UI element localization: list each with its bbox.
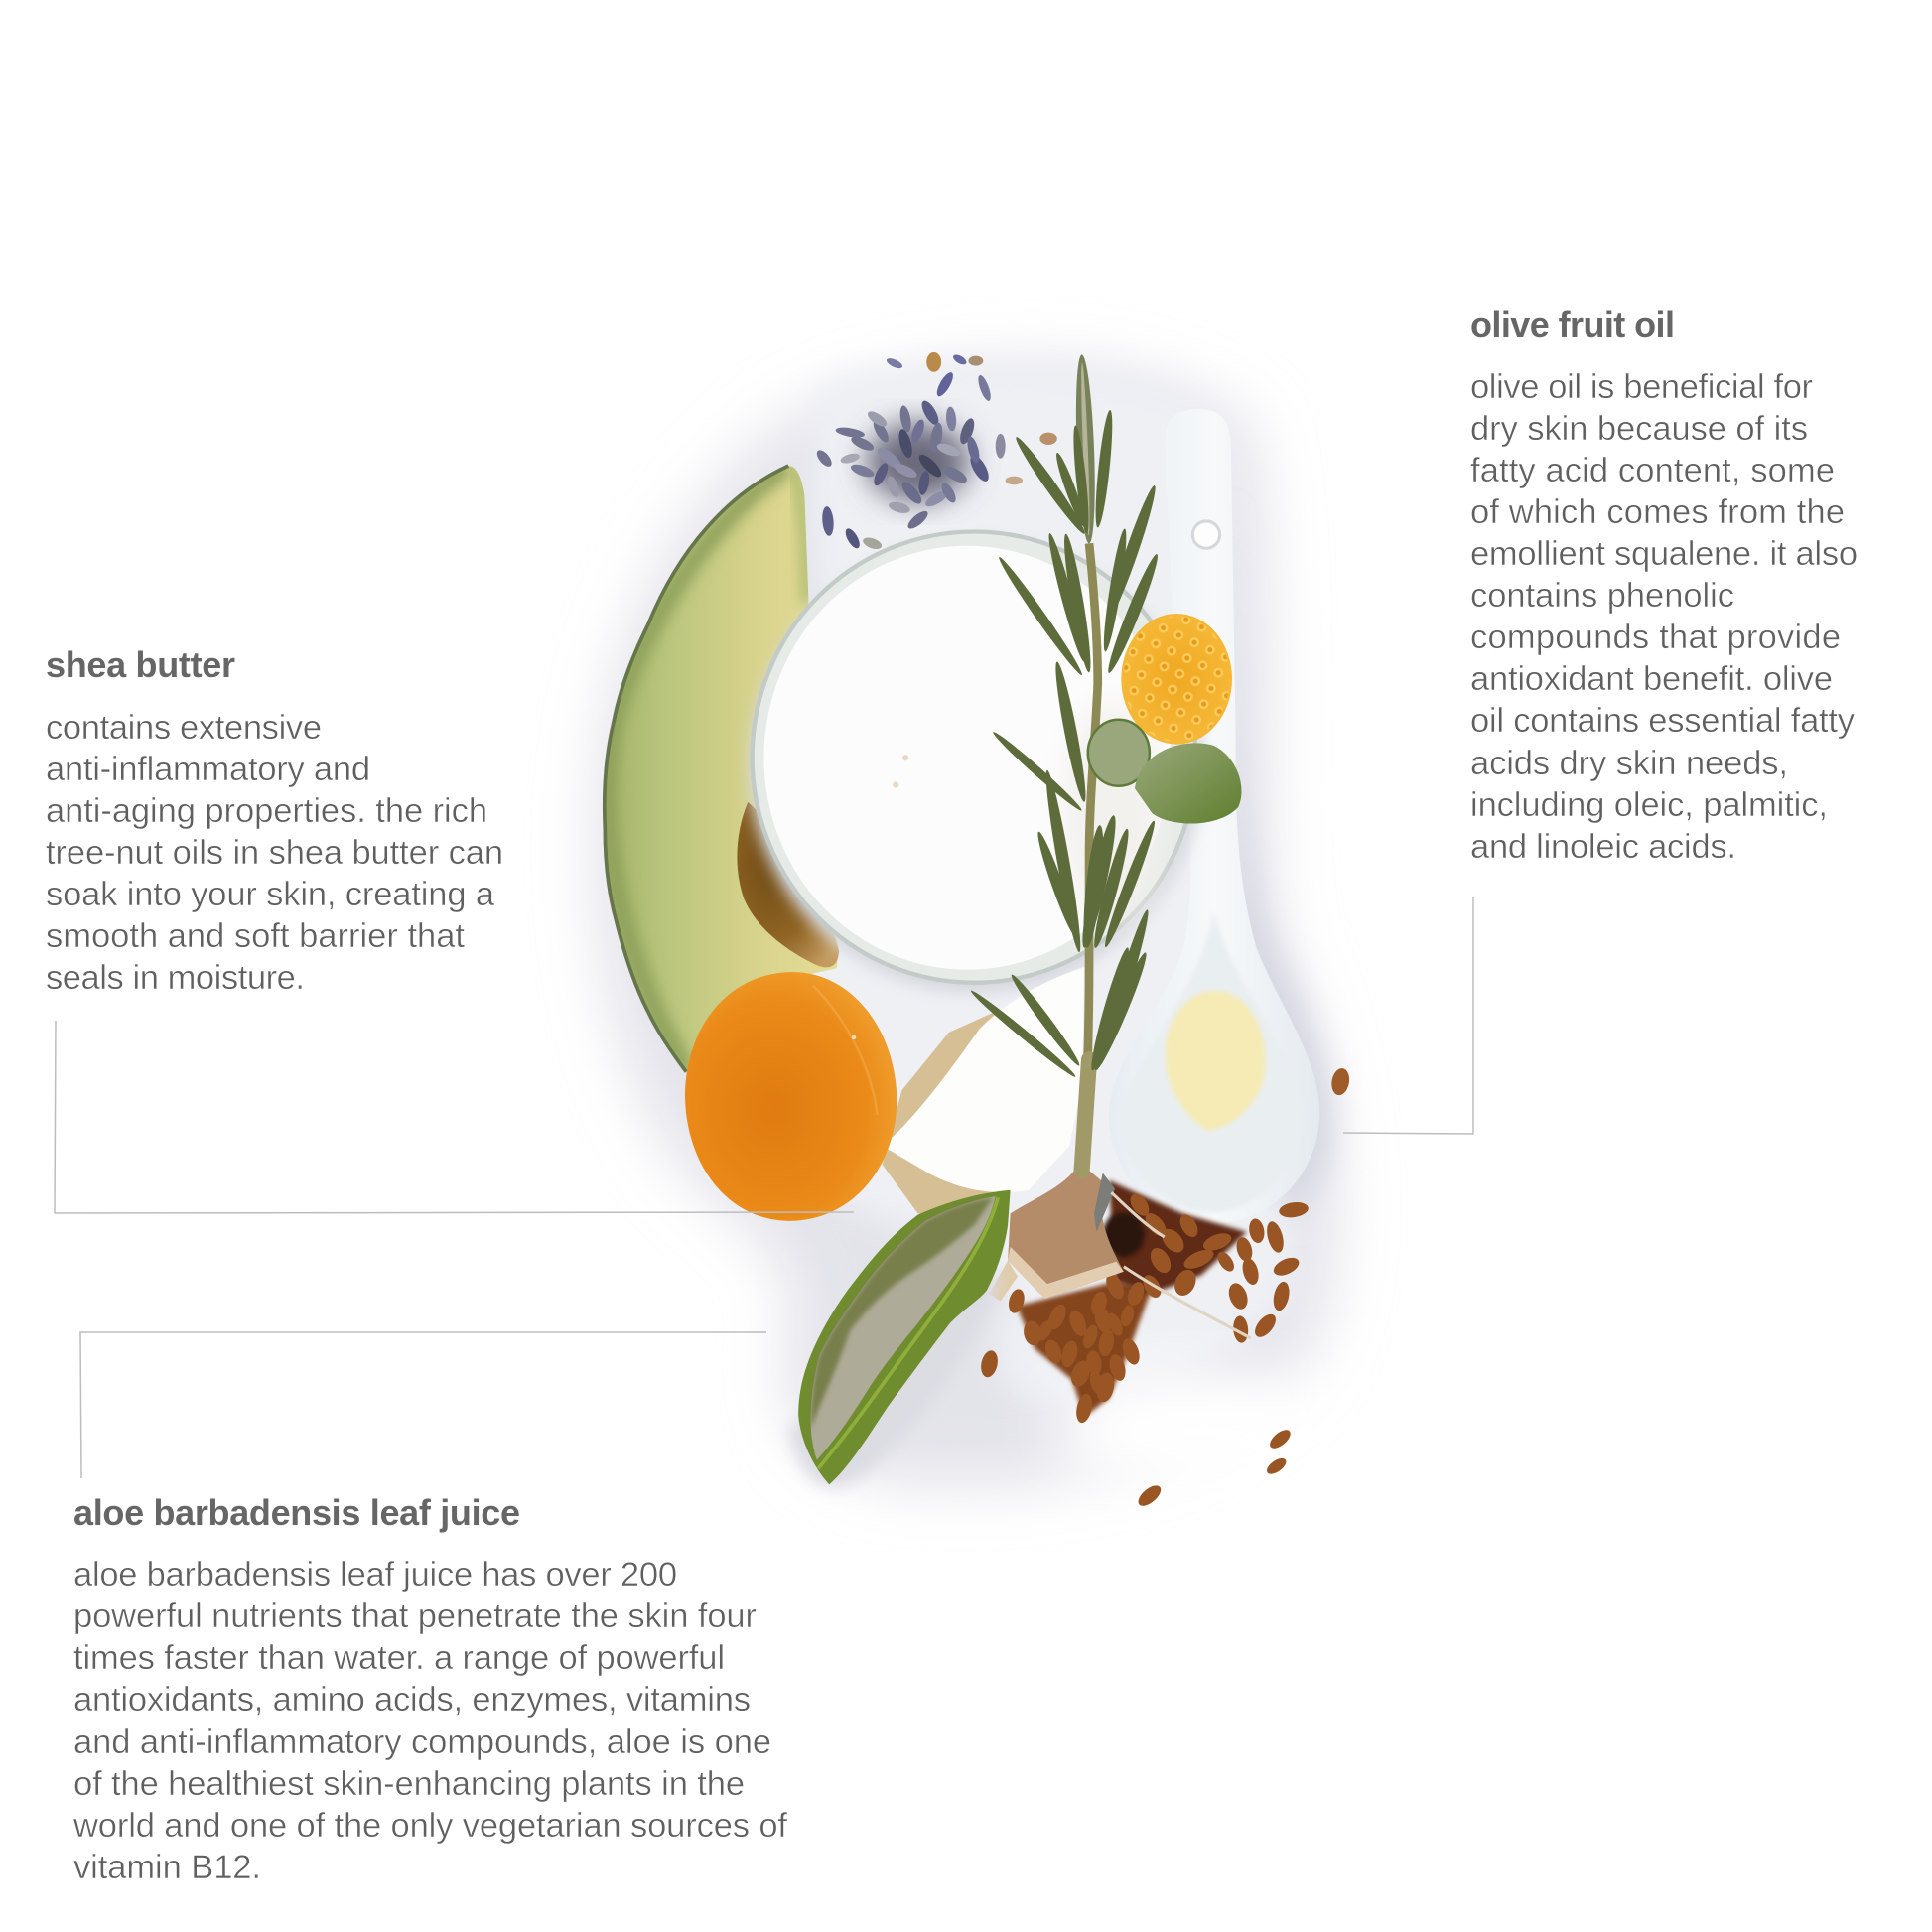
body: shea butter — [46, 709, 503, 997]
rosemary sprig — [968, 354, 1163, 1171]
body: aloe barbadensis leaf juice: of the healthiest skin-enhancing plants in the — [73, 1765, 745, 1803]
dried apricot — [685, 972, 897, 1221]
leader line: aloe barbadensis leaf juice — [80, 1332, 766, 1478]
bowl of cream — [750, 531, 1202, 993]
body: olive fruit oil: compounds that provide — [1470, 619, 1841, 656]
body: olive fruit oil: olive oil is beneficial for — [1470, 368, 1813, 406]
body: shea butter: contains extensive — [46, 709, 322, 747]
body: olive fruit oil: fatty acid content, some — [1470, 452, 1835, 489]
body: olive fruit oil: acids dry skin needs, — [1470, 745, 1788, 782]
text block: olive fruit oil — [1470, 304, 1858, 866]
body: olive fruit oil: including oleic, palmitic, — [1470, 786, 1828, 824]
heading: aloe barbadensis leaf juice: aloe barbadensis leaf juice — [73, 1492, 520, 1533]
small green leaves — [1088, 720, 1241, 824]
ingredients photo illustration — [595, 352, 1351, 1510]
body: shea butter: seals in moisture. — [46, 959, 305, 997]
body: olive fruit oil — [1470, 368, 1858, 866]
body: olive fruit oil: of which comes from the — [1470, 493, 1845, 531]
heading: shea butter: shea butter — [46, 644, 235, 685]
body: aloe barbadensis leaf juice: aloe barbadensis leaf juice has over 200 — [73, 1556, 677, 1593]
root threads — [1111, 1192, 1251, 1338]
text block: aloe barbadensis leaf juice — [72, 1492, 787, 1886]
body: aloe barbadensis leaf juice — [72, 1556, 787, 1886]
body: olive fruit oil: emollient squalene. it also — [1470, 535, 1858, 573]
body: aloe barbadensis leaf juice: world and one of the only vegetarian sources of — [72, 1807, 787, 1845]
text block: shea butter — [46, 644, 503, 997]
body: aloe barbadensis leaf juice: antioxidants, amino acids, enzymes, vitamins — [73, 1681, 751, 1719]
body: olive fruit oil: contains phenolic — [1470, 577, 1734, 615]
leader line: shea butter — [55, 1021, 854, 1213]
heading: olive fruit oil: olive fruit oil — [1470, 304, 1675, 345]
avocado slice — [605, 466, 839, 1072]
oil drop — [1166, 991, 1266, 1131]
soft halo background — [595, 364, 1337, 1491]
body: shea butter: soak into your skin, creating a — [46, 876, 495, 913]
body: olive fruit oil: dry skin because of its — [1470, 410, 1808, 448]
body: aloe barbadensis leaf juice: times faster than water. a range of powerful — [73, 1639, 725, 1677]
body: shea butter: tree-nut oils in shea butter can — [46, 834, 503, 872]
rosemary stem — [1084, 543, 1098, 1157]
golden berry — [1121, 614, 1232, 745]
aloe leaf — [788, 1190, 1011, 1487]
body: aloe barbadensis leaf juice: powerful nutrients that penetrate the skin four — [73, 1597, 757, 1635]
coconut and husk — [883, 967, 1084, 1217]
ginger root — [990, 1171, 1251, 1338]
body: olive fruit oil: oil contains essential fatty — [1470, 702, 1856, 740]
body: shea butter: anti-aging properties. the rich — [46, 792, 487, 830]
flax seeds — [979, 1067, 1351, 1510]
lavender buds — [814, 352, 1057, 551]
body: aloe barbadensis leaf juice: and anti-inflammatory compounds, aloe is one — [73, 1724, 771, 1761]
body: olive fruit oil: and linoleic acids. — [1470, 828, 1736, 866]
spoon hole — [1192, 521, 1220, 548]
spoon with oil — [1109, 409, 1331, 1223]
body: aloe barbadensis leaf juice: vitamin B12. — [73, 1849, 261, 1886]
leader line: olive fruit oil — [1343, 897, 1473, 1134]
avocado pit — [737, 802, 839, 967]
body: shea butter: anti-inflammatory and — [46, 751, 370, 788]
body: olive fruit oil: antioxidant benefit. olive — [1470, 660, 1833, 698]
body: shea butter: smooth and soft barrier that — [46, 917, 465, 955]
